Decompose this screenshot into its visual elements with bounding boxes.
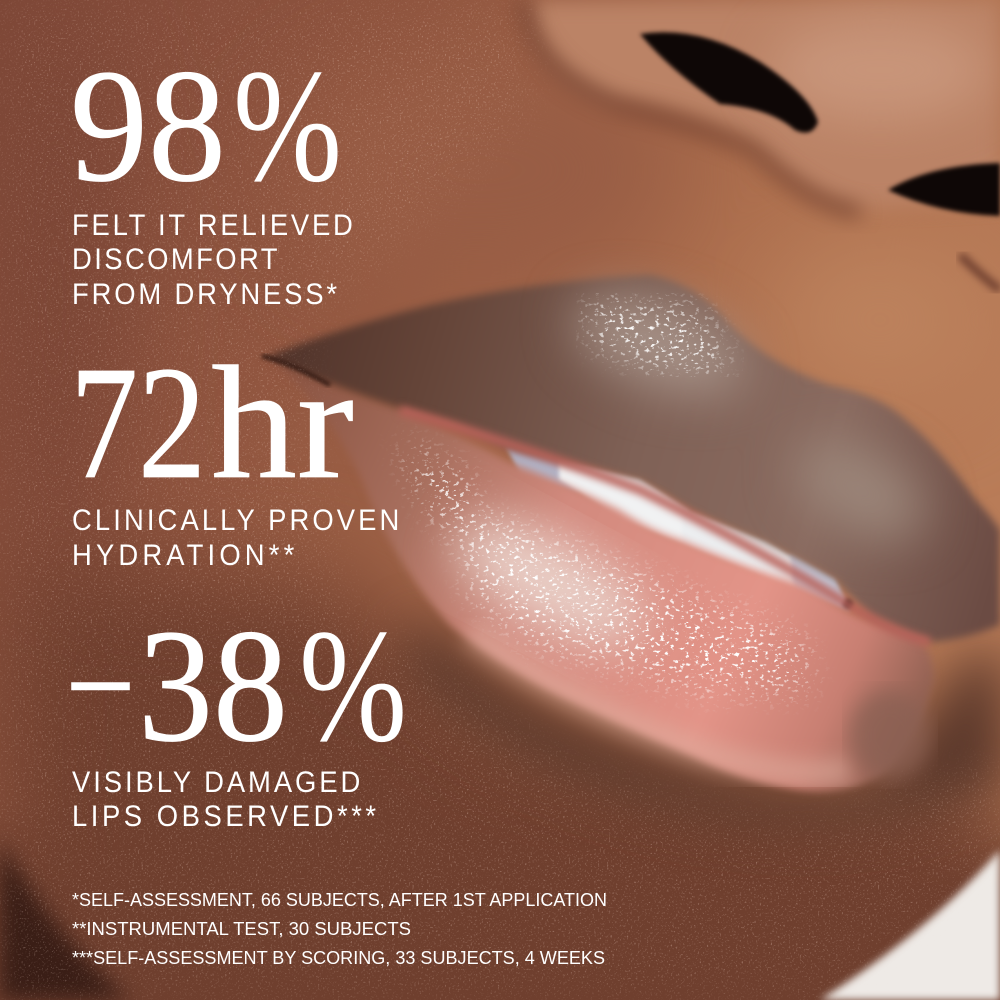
upper lip sparkles: [590, 300, 730, 370]
footnotes: *SELF-ASSESSMENT, 66 SUBJECTS, AFTER 1ST APPLICATION: [72, 890, 607, 910]
bottom skin tone: [0, 800, 1000, 1000]
lower lip: [272, 360, 934, 791]
bottom-left jaw shadow: [0, 840, 130, 1000]
nose crease: [525, 0, 860, 212]
upper lip highlights: [562, 277, 941, 560]
label: DISCOMFORT: [72, 243, 278, 276]
number: 72: [70, 334, 206, 513]
stat: 72hr: [70, 334, 399, 572]
label: LIPS OBSERVED***: [72, 800, 376, 833]
footnotes: [72, 890, 607, 968]
stat: -38%: [71, 581, 407, 833]
number: %: [233, 37, 342, 216]
number: 38: [138, 597, 288, 776]
white background corner: [820, 850, 1000, 1000]
label: HYDRATION**: [72, 539, 294, 572]
label: CLINICALLY PROVEN: [72, 504, 399, 537]
number: [71, 581, 407, 776]
label: VISIBLY DAMAGED: [72, 766, 360, 799]
footnotes: ***SELF-ASSESSMENT BY SCORING, 33 SUBJECTS, 4 WEEKS: [72, 948, 605, 968]
label: [72, 504, 399, 572]
nostril left: [640, 32, 818, 133]
lower lip right dark end: [850, 690, 930, 780]
number: %: [299, 597, 407, 776]
label: [72, 766, 376, 833]
nose: [525, 0, 1000, 290]
upper lip red lower edge: [400, 410, 930, 642]
nostril right: [888, 163, 1000, 216]
number: 98: [70, 37, 226, 216]
footnotes: **INSTRUMENTAL TEST, 30 SUBJECTS: [72, 919, 411, 939]
number: [70, 334, 354, 513]
shadow under lower lip: [400, 620, 1000, 825]
teeth: [506, 446, 853, 612]
stat: 98%: [70, 37, 353, 311]
label: [72, 209, 353, 311]
lower lip highlight: [438, 496, 662, 668]
upper lip: [268, 275, 1000, 642]
number: –: [71, 581, 130, 760]
number: [70, 37, 342, 216]
lower lip soft lower rim: [470, 632, 850, 773]
dark mouth corner: [262, 356, 330, 385]
number: hr: [211, 334, 354, 513]
label: FELT IT RELIEVED: [72, 209, 353, 242]
lower lip sparkles: [400, 440, 810, 690]
label: FROM DRYNESS*: [72, 278, 337, 311]
